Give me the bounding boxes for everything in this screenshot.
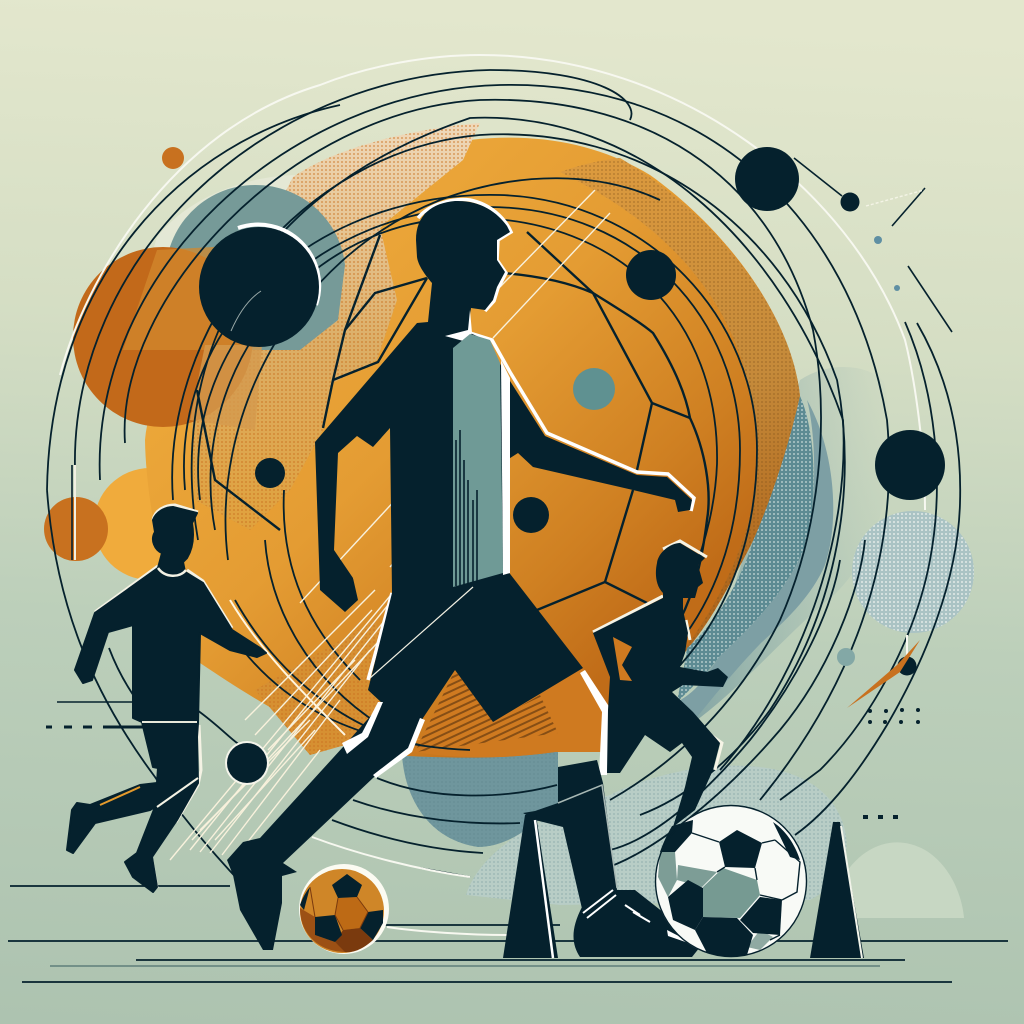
black dot lower right xyxy=(898,656,916,676)
knee highlight xyxy=(157,778,198,807)
black circle on ball xyxy=(626,250,676,300)
accent lines right xyxy=(57,158,952,702)
stipple over orange circle xyxy=(190,345,262,430)
pale stipple left of ball xyxy=(192,123,480,530)
right lower pentagon xyxy=(740,897,782,935)
solid teal fade outside band xyxy=(677,400,833,717)
orange stipple patch lower left xyxy=(255,620,420,755)
main player silhouette xyxy=(227,201,692,950)
top pentagon xyxy=(332,874,362,898)
right player rim xyxy=(593,541,722,770)
pale teal haze right xyxy=(690,367,890,725)
darker stippled rim of ball xyxy=(560,158,800,680)
ball body xyxy=(655,805,807,957)
teal circle on ball xyxy=(573,368,615,410)
orange accent stroke xyxy=(847,640,920,708)
right pentagon xyxy=(360,910,383,940)
cone right xyxy=(810,822,864,958)
right player silhouette xyxy=(593,543,728,827)
dashes right xyxy=(863,708,920,819)
black circle top right xyxy=(735,147,799,211)
ball panel lines xyxy=(197,232,709,620)
shirt teal panel xyxy=(453,334,503,587)
soccer ball small xyxy=(299,864,389,954)
dark patch top left of ball xyxy=(660,820,693,852)
left edge patch xyxy=(300,887,310,910)
bottom right grey panel xyxy=(747,930,773,950)
left player outline xyxy=(95,505,232,888)
concentric swirl lines xyxy=(47,70,960,905)
hatch on left orange circle xyxy=(123,245,250,350)
left player silhouette xyxy=(67,507,266,892)
centre seams xyxy=(310,887,368,930)
band stipple xyxy=(677,396,814,702)
small teal dot xyxy=(837,648,855,666)
top pentagon xyxy=(719,830,762,868)
white crescent xyxy=(299,864,389,954)
left lower pentagon xyxy=(668,880,703,930)
black circle top left with white rim xyxy=(199,225,319,347)
left pentagon xyxy=(315,915,342,942)
teal half circle under shorts xyxy=(402,733,558,847)
pale wavy stipple top left xyxy=(150,175,330,300)
small orange dot top xyxy=(162,147,184,169)
left player sock stripe xyxy=(100,787,140,805)
ground lines xyxy=(8,886,1008,982)
cone left xyxy=(503,815,558,958)
front leg xyxy=(523,760,700,957)
sock band xyxy=(558,785,617,888)
centre grey panel xyxy=(703,868,760,918)
yellow circle xyxy=(94,468,206,580)
main player white rim xyxy=(331,200,694,680)
pale dome lower right xyxy=(830,842,964,918)
seams xyxy=(656,806,806,956)
ball body xyxy=(300,869,384,953)
front leg white stripe xyxy=(580,670,610,775)
right player xyxy=(593,541,728,827)
orange hatch under shorts xyxy=(415,668,603,757)
black node left xyxy=(255,458,285,488)
shorts crease xyxy=(370,587,473,678)
shirt stripes xyxy=(456,430,477,586)
white tick beside vertical line xyxy=(74,465,76,560)
left orange circle xyxy=(73,247,253,427)
large orange ball blob xyxy=(145,138,800,758)
dotted white segment top right xyxy=(866,190,924,206)
dotted mound behind right player xyxy=(466,766,847,905)
black node centre xyxy=(513,497,549,533)
white hatch streaks xyxy=(170,190,610,860)
left player waist line xyxy=(142,721,197,723)
white orbit around lower left ball xyxy=(230,600,345,735)
collar xyxy=(445,310,472,342)
boot stripes xyxy=(583,890,650,922)
teal dotted right band xyxy=(677,396,814,702)
dark lower left xyxy=(300,908,346,952)
rim dot texture xyxy=(560,158,800,680)
big white orbit line xyxy=(60,55,925,935)
bottom pentagon xyxy=(695,917,753,956)
dotted pale circle right xyxy=(852,511,974,633)
soccer ball right xyxy=(655,805,807,957)
black circle right xyxy=(875,430,945,500)
tiny teal dots xyxy=(874,236,900,291)
right player arm gap xyxy=(613,637,632,681)
left player xyxy=(67,505,266,892)
shirt white side strip xyxy=(501,360,510,575)
dashes left xyxy=(46,726,143,728)
hatch texture xyxy=(415,670,558,752)
centre panel xyxy=(335,897,368,930)
boot toe highlight xyxy=(667,930,700,947)
leg white highlights xyxy=(342,702,425,778)
right edge patch xyxy=(773,822,800,860)
small orange circle left xyxy=(44,497,108,561)
middle grey panel xyxy=(677,865,717,887)
black dot far top right xyxy=(840,192,860,212)
left grey panel xyxy=(658,852,677,897)
teal circle top left xyxy=(165,185,345,350)
black circle lower left xyxy=(225,741,269,785)
left player collar xyxy=(158,568,186,576)
left stipple dots xyxy=(192,123,480,530)
main player xyxy=(227,200,700,957)
pale ground line xyxy=(50,965,880,967)
bottom brown panel xyxy=(335,928,373,952)
